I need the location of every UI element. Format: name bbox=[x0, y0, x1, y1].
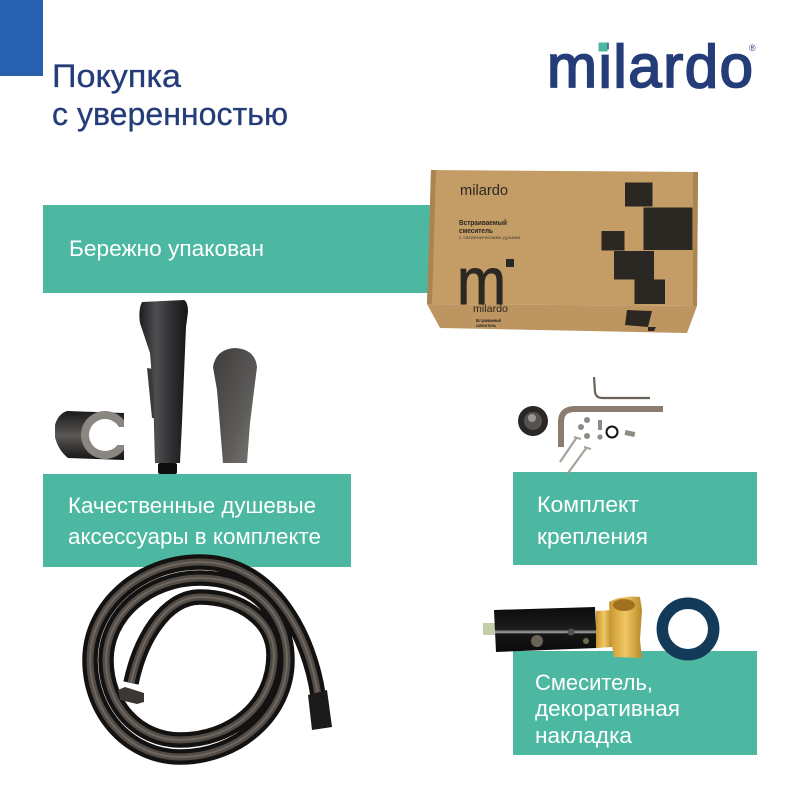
cardboard box: milardo bbox=[473, 303, 508, 315]
cardboard box: Встраиваемый bbox=[476, 317, 501, 323]
title: с уверенностью bbox=[52, 96, 288, 132]
icon: hose end fitting bbox=[308, 690, 332, 730]
icon: shower hose bbox=[90, 562, 318, 757]
panel: shower accessories: Качественные душевые bbox=[68, 493, 316, 518]
cardboard box bbox=[427, 170, 698, 333]
panel: mounting kit: Комплект bbox=[537, 492, 639, 517]
panel: mounting kit bbox=[513, 472, 757, 565]
icon: mounting kit parts bbox=[518, 377, 663, 473]
title: Покупка bbox=[52, 58, 181, 94]
panel: shower accessories: аксессуары в комплекте bbox=[68, 524, 321, 549]
icon: wall holder bbox=[55, 408, 134, 464]
logo: milardo: milardo bbox=[547, 33, 753, 100]
logo: milardo: ® bbox=[749, 43, 756, 53]
blue corner block bbox=[0, 0, 43, 76]
panel: mixer and decorative plate bbox=[513, 651, 757, 755]
panel: mixer and decorative plate: Смеситель, bbox=[535, 670, 653, 695]
cardboard box: смеситель bbox=[476, 323, 496, 328]
cardboard box: Встраиваемый bbox=[459, 218, 507, 227]
icon: hygienic shower head bbox=[139, 300, 188, 474]
panel: mixer and decorative plate: декоративная bbox=[535, 696, 680, 721]
icon: concealed mixer body bbox=[483, 597, 642, 658]
panel: mounting kit: крепления bbox=[537, 524, 648, 549]
icon: decorative ring plate bbox=[662, 603, 714, 655]
cardboard box: milardo bbox=[460, 182, 508, 199]
cardboard box: смеситель bbox=[459, 226, 493, 235]
panel: carefully packed bbox=[43, 205, 433, 293]
panel: carefully packed: Бережно упакован bbox=[69, 236, 264, 261]
icon: mixer lever bbox=[213, 348, 257, 463]
cardboard box: m bbox=[457, 244, 506, 318]
cardboard box: с гигиеническим душем bbox=[459, 235, 520, 240]
panel: shower accessories bbox=[43, 474, 351, 567]
panel: mixer and decorative plate: накладка bbox=[535, 723, 633, 748]
icon: hose hex nut bbox=[118, 687, 144, 704]
title bbox=[52, 58, 288, 132]
